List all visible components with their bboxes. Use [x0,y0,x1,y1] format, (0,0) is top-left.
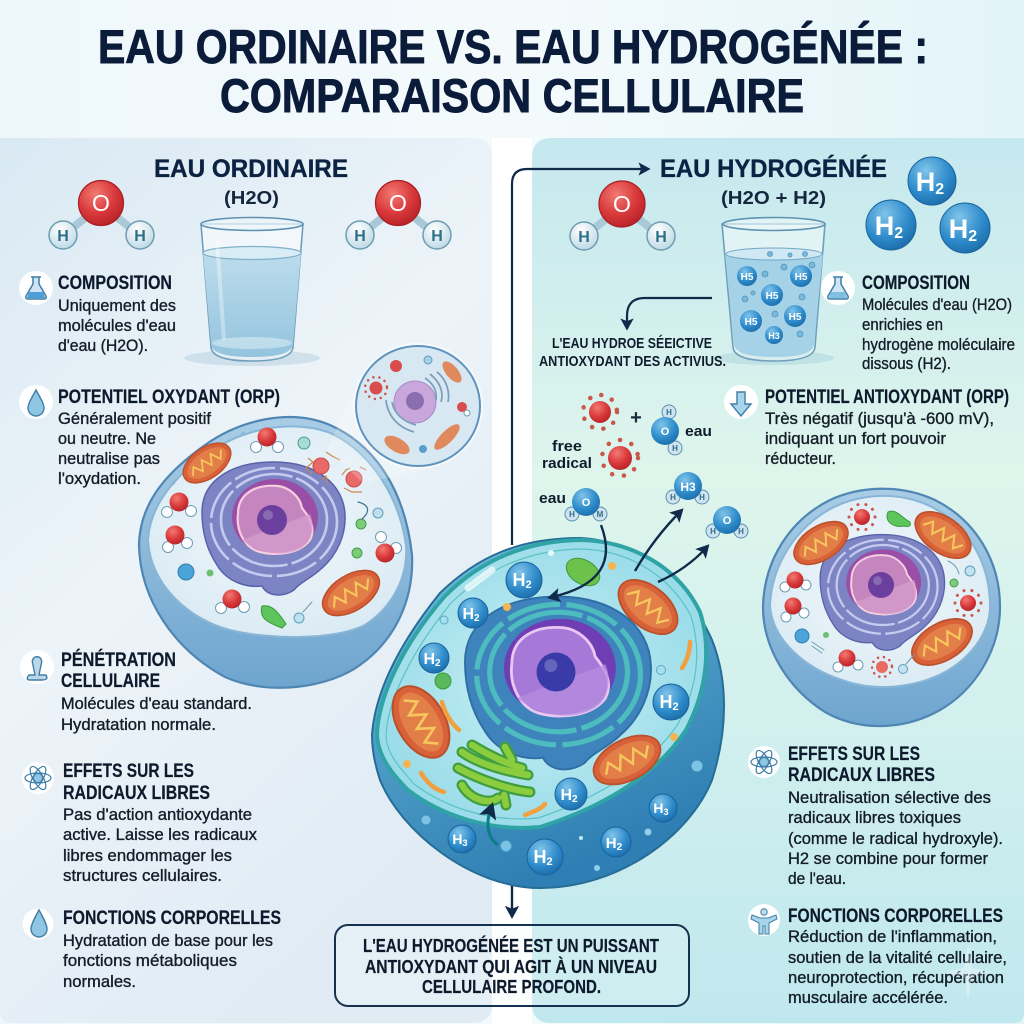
dissolved hydrogen bubbles: H5 [766,291,779,302]
free radical 1 [583,395,617,429]
body: potentiel antioxydant: indiquant un fort pouvoir [765,430,947,448]
text block: effets sur les radicaux libres (left) [22,761,258,885]
arrow: from central cell up to hydrogen water heading [512,169,646,545]
diagram: free radical reaction [539,395,748,538]
icon: water molecule right: H [578,229,590,246]
dissolved hydrogen bubbles: H3 [768,331,780,341]
body: potentiel oxydant: l'oxydation. [58,470,141,488]
water molecule blue 1 [651,405,682,455]
H2 spheres inside cell: 3 [664,807,669,817]
body: effets [788,789,1003,888]
icon: water molecule left 1: O [92,190,110,216]
dissolved hydrogen bubbles [737,252,815,344]
body: effets [63,806,258,885]
title: COMPARAISON CELLULAIRE [220,69,804,122]
icon: H2 spheres: 2 [894,225,903,242]
free radical 2 [602,440,638,476]
icon: water molecule left 2: H [431,228,443,245]
H2 spheres inside cell: 2 [435,658,441,669]
body: effets: Neutralisation sélective des [788,789,991,807]
icon: flask [821,271,855,305]
H2 spheres inside cell: 3 [463,838,468,848]
panel: eau hydrogénée background [532,138,1024,1023]
water molecule blue 2 [565,488,607,521]
dissolved hydrogen bubbles: H5 [741,272,754,283]
body: effets: Pas d'action antioxydante [63,806,252,824]
heading: effets: RADICAUX LIBRES [63,783,210,804]
small orange organelles [421,642,690,815]
icon: glass of ordinary water [184,218,320,366]
icon: flask [19,271,53,305]
H2 spheres inside cell: 2 [474,613,480,624]
small organelles [171,432,383,628]
green vesicles [435,553,605,689]
sparkle [944,944,992,1000]
heading: pénétration: CELLULAIRE [61,671,160,692]
H2 spheres inside cell: H [423,651,435,668]
water molecule blue 4 [706,506,748,538]
body: effets: (comme le radical hydroxyle). [788,830,1003,848]
body: fonctions: soutien de la vitalité cellulaire, [788,949,1007,967]
icon: water molecule left 1 [49,180,154,249]
heading: composition: COMPOSITION [58,273,172,294]
body: effets: radicaux libres toxiques [788,809,961,827]
water molecule blue 2: H [569,510,575,519]
body: composition [58,297,176,355]
text block: fonctions corporelles (right) [748,904,1007,1007]
water molecule blue 3: H [699,493,705,502]
icon: water molecule left 2 [346,180,451,249]
body: pénétration: Molécules d'eau standard. [61,695,252,713]
water molecule blue 2: M [597,510,604,519]
water molecule blue 2: O [582,497,591,509]
icon: radical atom [748,746,780,778]
water molecule blue 3: H3 [680,480,696,494]
icon: radical atom [22,762,54,794]
H2 spheres inside cell: H [512,570,525,590]
caption: selective antioxidant: ANTIOXYDANT DES ACTIVIUS. [539,353,726,370]
body: effets: structures cellulaires. [63,867,222,885]
H2 spheres inside cell: H [462,606,474,623]
icon: down arrow [724,385,758,419]
label: free radical: free [552,438,582,455]
mitochondria [381,569,688,795]
body: potentiel oxydant: ou neutre. Ne [58,430,156,448]
icon: glass of hydrogen water [714,218,834,365]
title [98,20,928,122]
heading: effets [63,761,210,804]
text block: potentiel oxydant [19,385,280,488]
icon: water molecule left 2: O [389,190,407,216]
water molecules [162,428,402,614]
H2 spheres inside cell: 2 [672,701,679,713]
free radicals [306,452,366,492]
body: potentiel oxydant [58,410,211,488]
water molecule blue 4: H [738,527,744,536]
icon: water molecule right: H [655,229,667,246]
icon: water molecule right [570,181,675,250]
heading: potentiel oxydant: POTENTIEL OXYDANT (ORP) [58,387,280,408]
plus sign: + [630,407,642,429]
water molecule blue 1: H [666,408,672,417]
body: fonctions [63,932,273,991]
heading: eau hydrogénée: EAU HYDROGÉNÉE [660,154,887,183]
body: fonctions [788,928,1007,1007]
golgi apparatus [458,745,530,805]
heading: effets [788,744,935,786]
icon: H2 spheres: 2 [935,181,944,198]
H2 spheres inside cell: 2 [546,856,553,868]
mitochondria [176,435,387,625]
H2 spheres inside cell: H [533,847,546,867]
caption: selective antioxidant: L'EAU HYDROE SÉEICTIVE [552,335,712,352]
body: composition: d'eau (H2O). [58,337,148,355]
label: free radical [542,438,592,472]
icon: water molecule left 1: H [134,228,146,245]
H2 spheres inside cell: 2 [525,579,532,591]
body: fonctions: Hydratation de base pour les [63,932,273,950]
nucleus and endoplasmic reticulum [465,597,651,769]
heading: effets: EFFETS SUR LES [63,761,194,782]
organelle dots [403,550,702,871]
icon: water molecule left 1: H [57,228,69,245]
text block: composition (left) [19,271,176,355]
callout: conclusion [335,925,689,1006]
body: composition: dissous (H2). [862,355,951,373]
body: pénétration [61,695,252,734]
text block: fonctions corporelles (left) [22,908,281,991]
heading: effets: RADICAUX LIBRES [788,765,935,786]
icon: H2 spheres: H [949,214,968,244]
illustration: zoomed cell detail [353,343,483,469]
label: eau 2: eau [539,490,566,507]
body: fonctions: Réduction de l'inflammation, [788,928,997,946]
water molecule blue 3: H [670,493,676,502]
icon: cell penetration [20,650,54,684]
body: composition: hydrogène moléculaire [862,336,1015,354]
icon: H2 spheres: 2 [968,228,977,245]
body: composition [862,296,1015,373]
body: effets: libres endommager les [63,847,232,865]
icon: drop [19,385,53,419]
heading: eau ordinaire [154,155,348,208]
heading: eau hydrogénée [660,154,887,208]
heading: pénétration [61,649,176,692]
caption: selective antioxidant [539,335,726,370]
H2 spheres inside cell: H [606,835,617,852]
H2 spheres inside cell: H [653,800,664,816]
panel: eau ordinaire background [0,138,492,1023]
icon: person [748,904,780,936]
arrows: molecules into and out of cell [552,512,706,597]
heading: eau hydrogénée: (H2O + H2) [721,188,826,208]
body: composition: enrichies en [862,316,943,334]
text block: composition (right) [821,271,1015,373]
body: effets: de l'eau. [788,870,846,888]
illustration: ordinary cell [139,417,412,688]
water molecule blue 3 [666,472,709,504]
text block: effets sur les radicaux libres (right) [748,744,1003,888]
icon: drop [22,908,54,940]
body: fonctions: neuroprotection, récupération [788,969,1004,987]
water molecule blue 1: H [672,444,678,453]
water molecule blue 4: O [723,515,732,527]
body: effets: H2 se combine pour former [788,850,989,868]
H2 spheres inside cell: H [452,831,463,847]
text block: pénétration cellulaire [20,649,252,734]
icon: water molecule right: O [613,191,631,217]
heading: eau ordinaire: EAU ORDINAIRE [154,155,348,183]
heading: eau ordinaire: (H2O) [224,188,279,208]
H2 spheres inside cell: 2 [572,794,578,805]
body: pénétration: Hydratation normale. [61,716,216,734]
white divider [492,138,532,1024]
body: potentiel antioxydant: Très négatif (jusqu'à -600 mV), [765,410,994,428]
callout: conclusion: CELLULAIRE PROFOND. [422,977,601,997]
heading: composition: COMPOSITION [862,273,970,294]
heading: fonctions: FONCTIONS CORPORELLES [63,908,281,929]
body: fonctions: normales. [63,973,136,991]
body: potentiel oxydant: neutralise pas [58,450,160,468]
dissolved hydrogen bubbles: H5 [789,312,802,323]
H2 spheres inside cell: 2 [617,842,623,853]
body: potentiel oxydant: Généralement positif [58,410,211,428]
body: potentiel antioxydant: réducteur. [765,450,836,468]
body: composition: Uniquement des [58,297,176,315]
dissolved hydrogen bubbles: H5 [795,272,808,283]
nucleus and endoplasmic reticulum [820,535,945,650]
icon: H2 spheres: H [875,211,894,241]
text block: potentiel antioxydant [724,385,1009,468]
illustration: central cell with H2 [372,538,724,888]
label: free radical: radical [542,455,592,472]
body: fonctions: musculaire accélérée. [788,989,948,1007]
molecules and organelles [780,504,981,677]
mitochondria [787,502,980,675]
water molecule blue 4: H [710,527,716,536]
H2 spheres inside cell [419,562,689,875]
callout leader beam [327,392,433,483]
heading: pénétration: PÉNÉTRATION [61,649,176,671]
title: EAU ORDINAIRE VS. EAU HYDROGÉNÉE : [98,20,928,73]
arrow: teal entering membrane [488,808,498,845]
water molecule blue 1: O [661,426,670,438]
body: composition: molécules d'eau [58,317,176,335]
arrow: glass to caption [627,298,712,326]
body: fonctions: fonctions métaboliques [63,952,237,970]
H2 spheres inside cell: H [659,692,672,712]
arrow: central cell down to conclusion [511,880,513,914]
icon: H2 spheres [866,157,990,253]
callout: conclusion: L'EAU HYDROGÉNÉE EST UN PUISSANT [363,935,659,956]
illustration: cell with hydrogen water, right [763,489,1000,726]
dissolved hydrogen bubbles: H5 [745,317,758,328]
label: eau: eau [685,423,712,440]
H2 spheres inside cell: H [560,787,572,804]
nucleus and endoplasmic reticulum [202,462,345,595]
callout: conclusion: ANTIOXYDANT QUI AGIT À UN NIVEAU [365,956,657,977]
icon: H2 spheres: H [916,167,935,197]
body: potentiel antioxydant [765,410,994,468]
icon: water molecule left 2: H [354,228,366,245]
heading: effets: EFFETS SUR LES [788,744,920,765]
body: effets: active. Laisse les radicaux [63,826,258,844]
